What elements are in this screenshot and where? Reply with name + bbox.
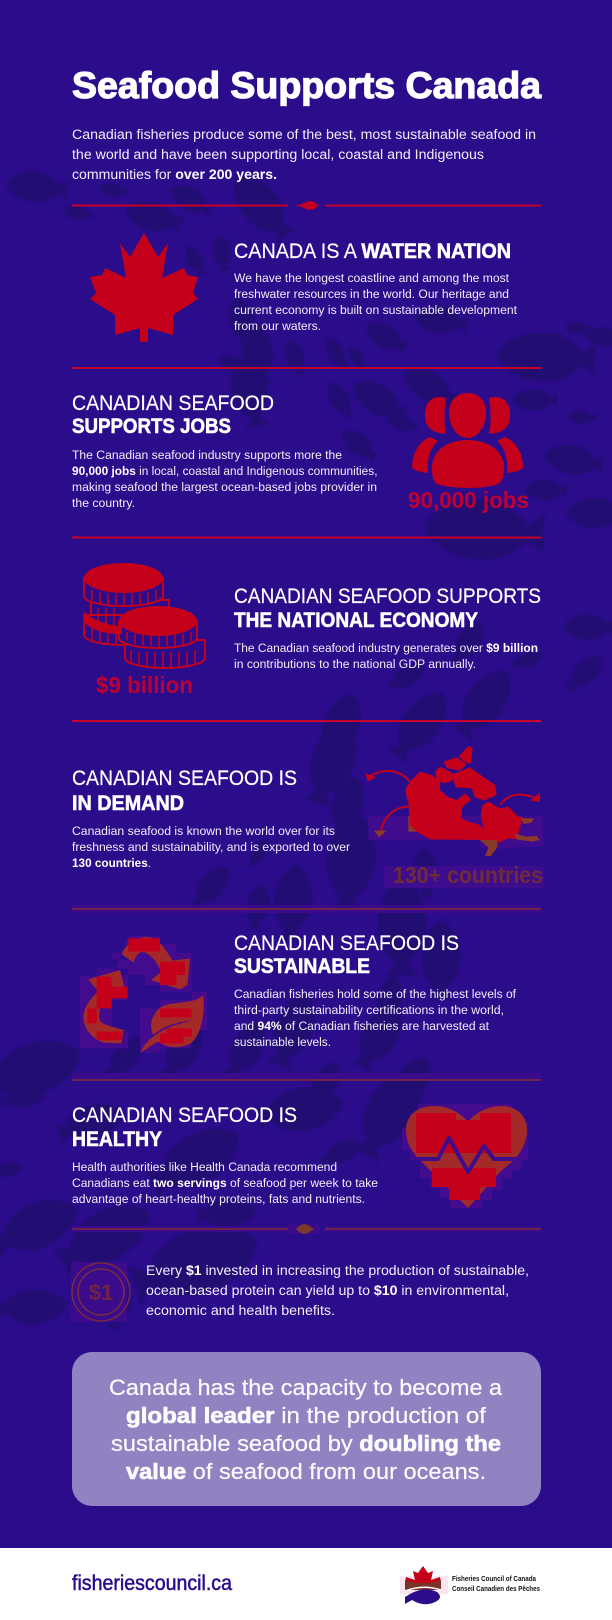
icon: Canada map with export arrows xyxy=(366,746,543,856)
footer band xyxy=(0,1548,612,1620)
text: water nation: freshwater resources in the world. Our heritage and xyxy=(234,287,509,301)
callout: $1 coin and return on investment xyxy=(71,1262,529,1322)
section: water nation xyxy=(90,233,518,342)
website: fisheriescouncil.ca xyxy=(72,1572,232,1595)
text: healthy: Canadians eat two servings of seafood per week to take xyxy=(72,1176,378,1190)
heading: national economy xyxy=(234,584,541,632)
text: sustainable: third-party sustainability certifications in the world, xyxy=(234,1003,504,1017)
intro paragraph xyxy=(72,127,536,183)
intro paragraph: Canadian fisheries produce some of the best, most sustainable seafood in xyxy=(72,127,536,143)
heading: jobs: SUPPORTS JOBS xyxy=(72,414,231,438)
text: sustainable: and 94% of Canadian fisheries are harvested at xyxy=(234,1019,490,1033)
section: national economy xyxy=(84,563,541,698)
heading: national economy: CANADIAN SEAFOOD SUPPORTS xyxy=(234,584,541,608)
text: sustainable xyxy=(234,987,517,1049)
text: jobs: 90,000 jobs in local, coastal and Indigenous communities, xyxy=(72,464,378,478)
heading: in demand xyxy=(72,766,297,815)
divider with fish xyxy=(72,201,541,210)
heading: sustainable: SUSTAINABLE xyxy=(234,954,370,978)
text: water nation: We have the longest coastline and among the most xyxy=(234,271,510,285)
text: $1 return: ocean-based protein can yield up to $10 in environmental, xyxy=(146,1283,509,1299)
divider with fish xyxy=(72,1224,541,1234)
text: $1 return: Every $1 invested in increasing the production of sustainable, xyxy=(146,1263,529,1279)
stat: 90,000 jobs: 90,000 jobs xyxy=(408,487,529,513)
section: healthy xyxy=(72,1103,528,1208)
stat: 130+ countries: 130+ countries xyxy=(393,862,543,888)
text: in demand xyxy=(72,824,350,870)
stat: $9 billion: $9 billion xyxy=(96,672,193,698)
icon: $1 coin xyxy=(71,1262,130,1322)
icon: heart with pulse xyxy=(402,1104,528,1208)
text: jobs: making seafood the largest ocean-based jobs provider in xyxy=(72,480,377,494)
text: in demand: Canadian seafood is known the world over for its xyxy=(72,824,335,838)
logo: Fisheries Council of Canada: Fisheries Council of Canada xyxy=(452,1574,537,1583)
text: water nation: from our waters. xyxy=(234,319,321,333)
callout panel: global leader: Canada has the capacity to become a xyxy=(109,1375,502,1400)
text: healthy: advantage of heart-healthy proteins, fats and nutrients. xyxy=(72,1192,365,1206)
icon: coins xyxy=(84,578,205,668)
text: national economy: The Canadian seafood industry generates over $9 billion xyxy=(234,641,538,655)
text: $1 return: economic and health benefits. xyxy=(146,1303,335,1319)
callout panel: global leader xyxy=(72,1352,541,1506)
heading: sustainable: CANADIAN SEAFOOD IS xyxy=(234,931,459,955)
text: healthy: Health authorities like Health Canada recommend xyxy=(72,1160,337,1174)
heading: national economy: THE NATIONAL ECONOMY xyxy=(234,608,478,632)
heading: in demand: IN DEMAND xyxy=(72,791,184,815)
text: national economy xyxy=(234,641,538,671)
callout panel: global leader: value of seafood from our oceans. xyxy=(126,1459,486,1484)
intro paragraph: the world and have been supporting local, coastal and Indigenous xyxy=(72,147,484,163)
callout panel: global leader: global leader in the production of xyxy=(126,1403,487,1428)
heading: jobs xyxy=(72,391,274,438)
text: jobs: The Canadian seafood industry supports more the xyxy=(72,448,342,462)
heading: healthy xyxy=(72,1103,297,1151)
text: sustainable: sustainable levels. xyxy=(234,1035,331,1049)
text: in demand: freshness and sustainability, and is exported to over xyxy=(72,840,350,854)
background school of fish xyxy=(0,165,612,1332)
section: in demand xyxy=(72,746,544,888)
callout panel: global leader: sustainable seafood by doubling the xyxy=(111,1431,501,1456)
text: water nation xyxy=(234,271,518,333)
title: Seafood Supports Canada xyxy=(72,65,541,106)
logo: Fisheries Council of Canada: Conseil Canadien des Pêches xyxy=(452,1584,540,1593)
heading: sustainable xyxy=(234,931,459,978)
text: healthy xyxy=(72,1160,378,1206)
icon: recycling arrows and leaf xyxy=(80,936,207,1053)
logo: Fisheries Council of Canada xyxy=(400,1566,540,1604)
icon: $1 coin: $1 xyxy=(89,1280,113,1305)
text: jobs xyxy=(72,448,378,510)
heading: water nation: CANADA IS A WATER NATION xyxy=(234,239,511,263)
heading: healthy: CANADIAN SEAFOOD IS xyxy=(72,1103,297,1127)
text: in demand: 130 countries. xyxy=(72,856,151,870)
heading: healthy: HEALTHY xyxy=(72,1127,162,1151)
text: sustainable: Canadian fisheries hold some of the highest levels of xyxy=(234,987,517,1001)
text: water nation: current economy is built on sustainable development xyxy=(234,303,518,317)
heading: jobs: CANADIAN SEAFOOD xyxy=(72,391,274,415)
section: jobs xyxy=(72,391,529,513)
text: jobs: the country. xyxy=(72,496,135,510)
icon: maple leaf xyxy=(90,233,198,342)
section: sustainable xyxy=(80,931,517,1053)
heading: in demand: CANADIAN SEAFOOD IS xyxy=(72,766,297,790)
intro paragraph: communities for over 200 years. xyxy=(72,167,277,183)
text: national economy: in contributions to the national GDP annually. xyxy=(234,657,476,671)
text: $1 return xyxy=(146,1263,529,1319)
icon: people xyxy=(412,393,523,488)
